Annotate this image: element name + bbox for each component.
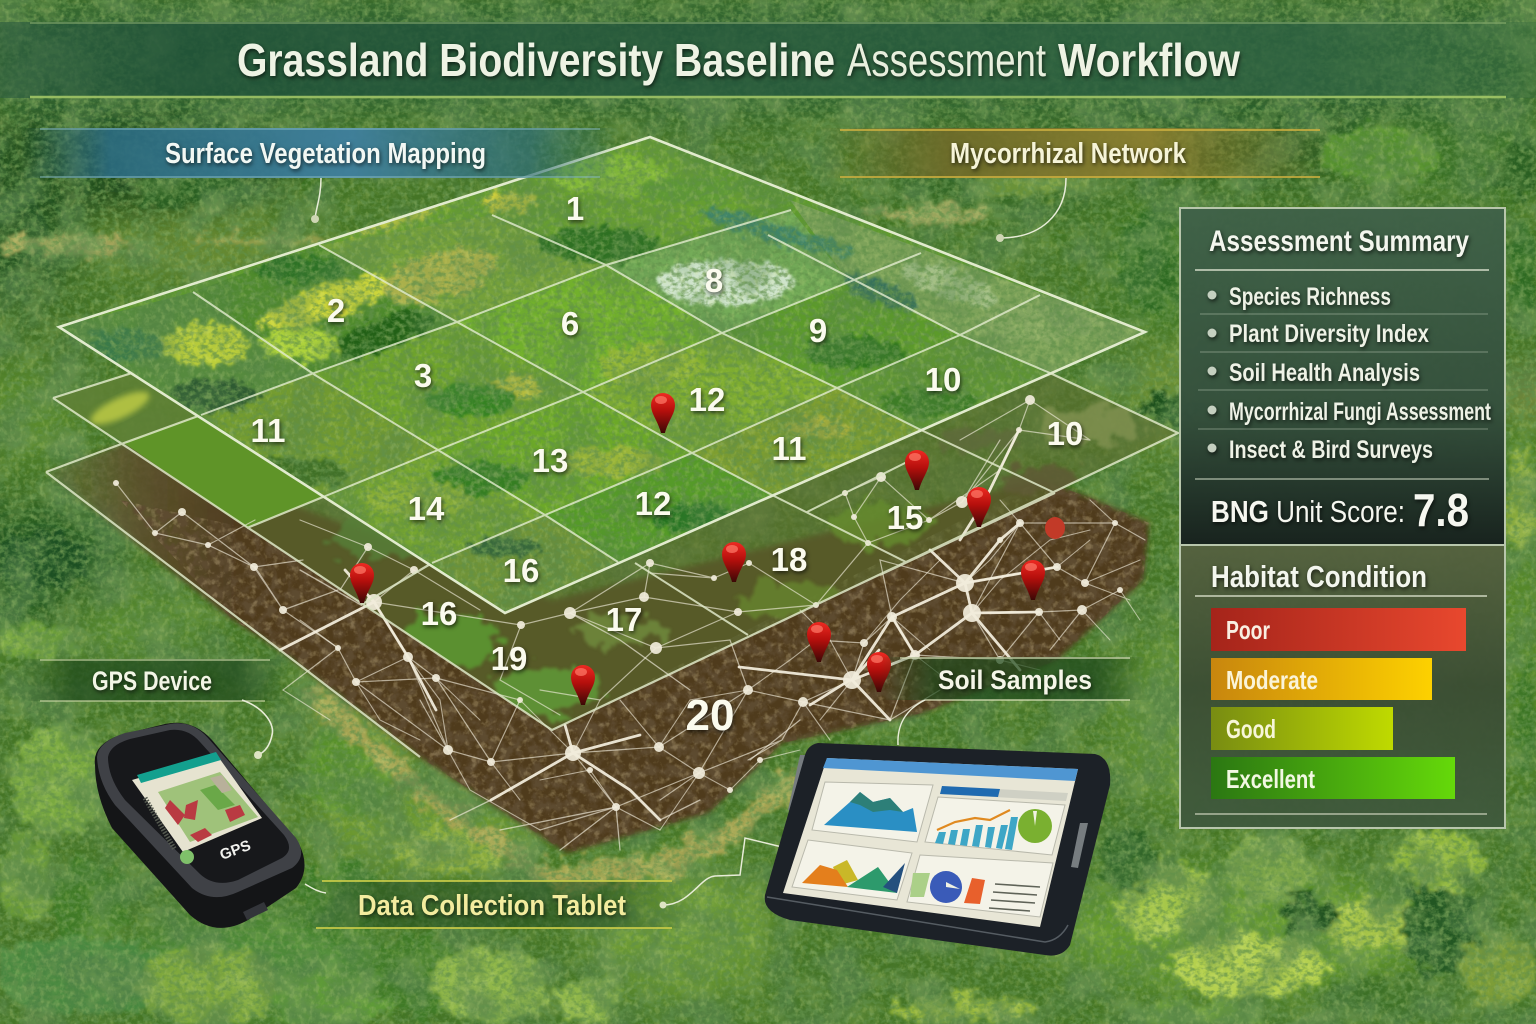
19: 19 [491, 640, 527, 677]
panel: assessment summary [1180, 208, 1505, 545]
18: 18 [771, 541, 807, 578]
soil sample marker [1045, 517, 1065, 539]
sheet outlines: lower layers [46, 373, 1178, 757]
BNG score: 7.8 [1413, 484, 1469, 536]
12: 12 [635, 485, 671, 522]
chart: mountain area [792, 840, 912, 900]
panel: soil layer [50, 442, 1152, 856]
10: 10 [925, 361, 961, 398]
bar: Excellent: Excellent [1226, 764, 1315, 794]
pin [807, 622, 831, 662]
9: 9 [809, 312, 827, 349]
label: Mycorrhizal Network: Mycorrhizal Network [950, 138, 1187, 170]
panel: middle sheet translucent layer [53, 370, 1190, 740]
grid lines [193, 210, 1050, 563]
14: 14 [408, 490, 445, 527]
bar: Good [1211, 707, 1393, 750]
bar: Good: Good [1226, 714, 1276, 744]
label: Data Collection Tablet [300, 838, 782, 928]
bar: Moderate: Moderate [1226, 665, 1318, 695]
11: 11 [251, 412, 285, 449]
red sample pins [350, 393, 1065, 705]
pin [867, 652, 891, 692]
pin [571, 665, 595, 705]
2: 2 [327, 292, 345, 329]
title banner: Workflow [1058, 34, 1240, 86]
15: 15 [887, 499, 923, 536]
heading: Habitat Condition [1211, 559, 1427, 594]
bar: Poor [1211, 608, 1466, 651]
diagram: mycorrhizal network [113, 395, 1145, 850]
11: 11 [772, 430, 806, 467]
grid cell numbers [251, 190, 1083, 740]
list: summary items: Insect & Bird Surveys [1229, 436, 1433, 464]
title banner: Grassland Biodiversity Baseline [237, 34, 835, 86]
pin [651, 393, 675, 433]
pin [905, 450, 929, 490]
list: summary items [1208, 283, 1491, 464]
cell: upper-left translucent middle sheet [53, 373, 201, 443]
chart: gauge and legend [907, 855, 1053, 917]
17: 17 [606, 601, 642, 638]
pin [350, 563, 374, 603]
bar: Moderate [1211, 658, 1432, 700]
label: GPS Device: GPS Device [92, 666, 212, 696]
icon: data collection tablet [765, 743, 1110, 956]
list: summary items: Soil Health Analysis [1229, 359, 1420, 387]
bar: Poor: Poor [1226, 615, 1270, 645]
10: 10 [1047, 415, 1083, 452]
6: 6 [561, 305, 579, 342]
1: 1 [566, 190, 584, 227]
16: 16 [421, 595, 457, 632]
cell colours [59, 137, 1145, 613]
label: GPS Device [20, 659, 290, 759]
label: Soil Samples: Soil Samples [938, 665, 1092, 695]
pin [722, 542, 746, 582]
20: 20 [686, 691, 734, 740]
16: 16 [503, 552, 539, 589]
title banner: Assessment [847, 34, 1046, 86]
chart: area [812, 782, 933, 842]
label: Surface Vegetation Mapping: Surface Vegetation Mapping [165, 138, 486, 170]
heading: Assessment Summary [1209, 225, 1469, 258]
12: 12 [689, 381, 725, 418]
foliage patches [85, 155, 1100, 557]
BNG score: BNG Unit Score: [1211, 494, 1405, 529]
icon: GPS device: GPS [218, 837, 253, 864]
label: Data Collection Tablet: Data Collection Tablet [358, 890, 626, 922]
chart: bars and line [925, 797, 1065, 855]
screen [783, 758, 1078, 927]
3: 3 [414, 357, 432, 394]
bar: Excellent [1211, 757, 1455, 799]
cell: grass middle sheet [124, 415, 323, 528]
list: summary items: Species Richness [1229, 283, 1391, 311]
screen [132, 755, 262, 852]
label: Mycorrhizal Network [820, 128, 1330, 242]
panel: surface vegetation sheet [56, 136, 1148, 614]
panel: habitat condition [1180, 545, 1505, 828]
patch: yellow shrub [87, 385, 153, 431]
label: Soil Samples [880, 657, 1150, 745]
pin [1021, 560, 1045, 600]
label: Surface Vegetation Mapping [20, 128, 620, 223]
BNG score [1211, 484, 1469, 536]
list: summary items: Plant Diversity Index [1229, 320, 1429, 348]
13: 13 [532, 442, 568, 479]
title banner [0, 22, 1536, 98]
pin [967, 487, 991, 527]
icon: GPS device [95, 723, 305, 928]
8: 8 [705, 262, 723, 299]
